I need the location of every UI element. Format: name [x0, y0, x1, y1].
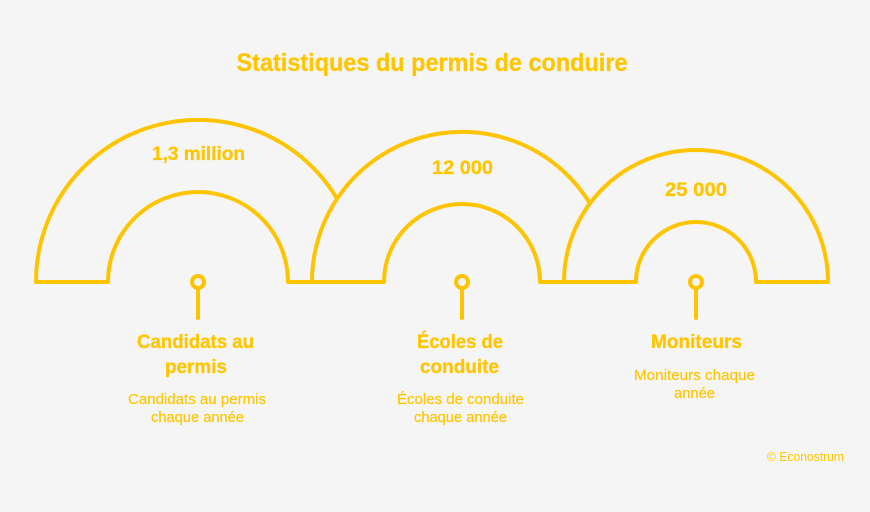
description 2 — [397, 391, 524, 426]
value 2: 12 000 — [432, 158, 493, 179]
heading 1: permis — [165, 357, 227, 378]
heading 2: conduite — [420, 357, 499, 378]
description 1: chaque année — [151, 409, 244, 426]
credit: © Econostrum — [767, 450, 844, 464]
pin marker 3 — [690, 276, 702, 318]
arch shape 1 — [36, 120, 336, 282]
heading 2: Écoles de — [417, 331, 503, 353]
description 3: année — [674, 385, 715, 402]
description 2: Écoles de conduite — [397, 391, 524, 408]
heading 1 — [137, 332, 254, 378]
pin marker 1 — [192, 276, 204, 318]
description 1 — [128, 391, 266, 426]
description 3: Moniteurs chaque — [634, 367, 755, 384]
panel: moniteurs — [564, 150, 828, 402]
panel: candidats au permis — [36, 120, 336, 426]
description 2: chaque année — [414, 409, 507, 426]
description 1: Candidats au permis — [128, 391, 266, 408]
value 3: 25 000 — [665, 180, 727, 201]
arch shape 3 — [564, 150, 828, 282]
description 3 — [634, 367, 755, 402]
title: Statistiques du permis de conduire — [236, 49, 628, 77]
value 1: 1,3 million — [152, 144, 245, 165]
pin marker 2 — [456, 276, 468, 318]
heading 3: Moniteurs — [651, 332, 742, 353]
panel: écoles de conduite — [312, 132, 589, 426]
heading 2 — [417, 331, 503, 378]
heading 1: Candidats au — [137, 332, 254, 353]
arch shape 2 — [312, 132, 589, 282]
